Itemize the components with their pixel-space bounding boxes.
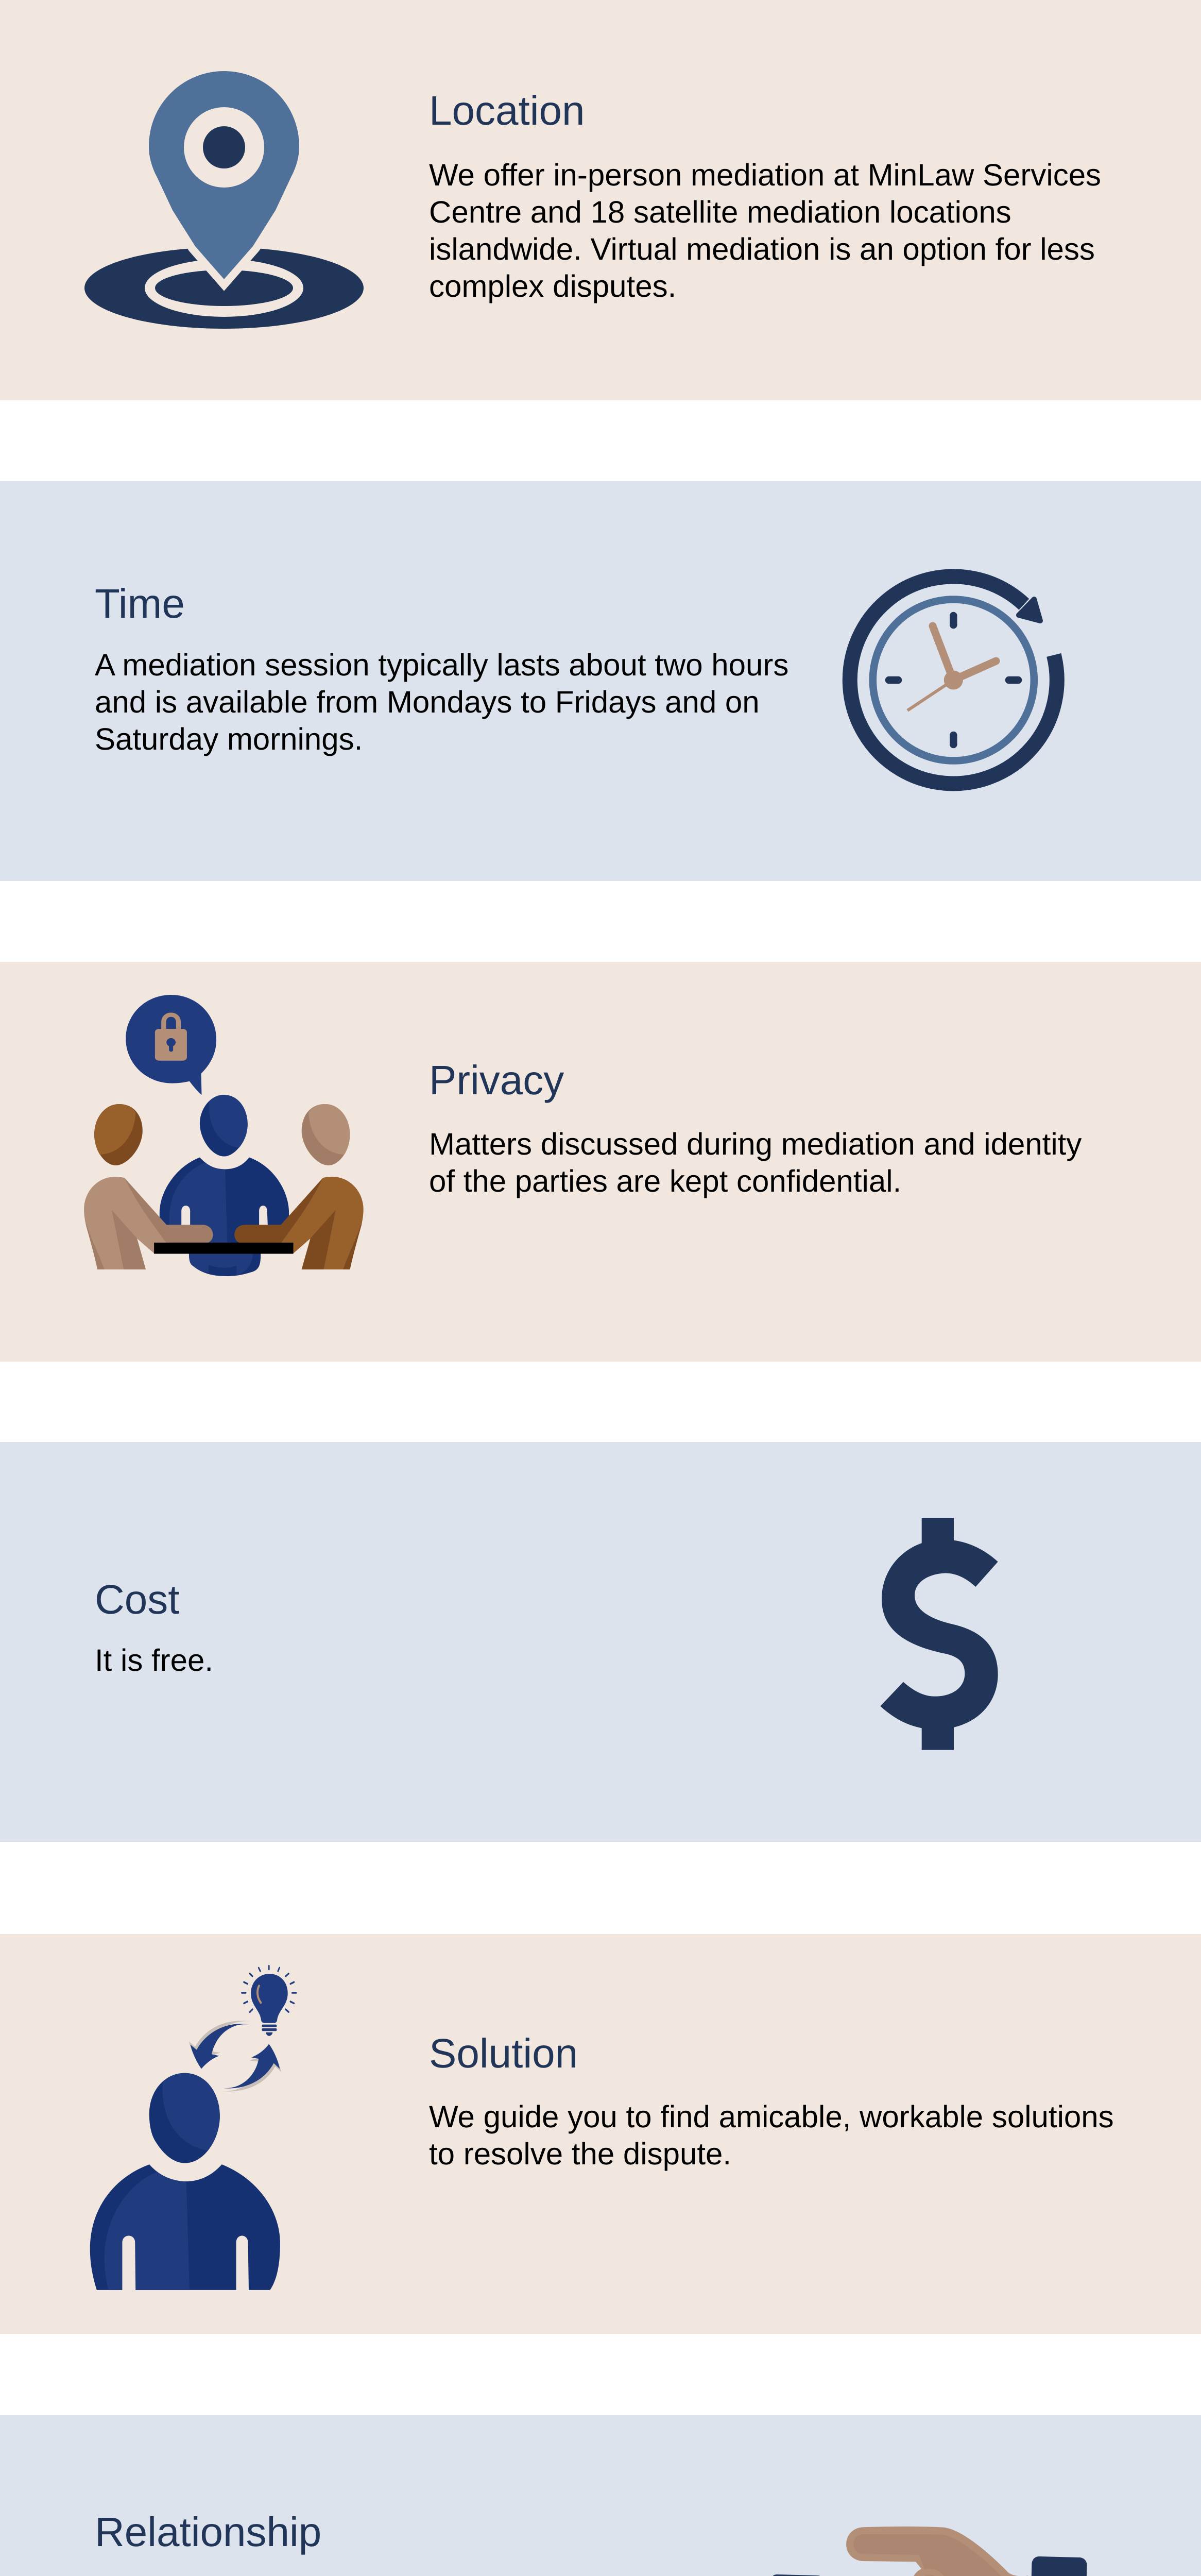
text: solution description: to resolve the dispute. <box>429 2137 731 2171</box>
heading: privacy: Privacy <box>429 1057 564 1103</box>
icon: two hands <box>767 2527 1087 2576</box>
heading: solution: Solution <box>429 2030 578 2076</box>
icon: light bulb <box>242 1966 296 2036</box>
heading: time: Time <box>95 581 185 626</box>
text: time description: Saturday mornings. <box>95 722 363 756</box>
panel: time <box>0 481 1201 881</box>
text: location description: We offer in-person mediation at MinLaw Services <box>429 158 1101 192</box>
icon: clock <box>850 577 1057 784</box>
panel: relationship <box>0 2415 1201 2576</box>
icon: dollar sign <box>880 1518 998 1750</box>
icon: three people at a table with a lock bubble <box>84 995 364 1276</box>
text: location description: Centre and 18 satellite mediation locations <box>429 195 1011 229</box>
heading: cost: Cost <box>95 1577 179 1622</box>
text: location description: islandwide. Virtual mediation is an option for less <box>429 232 1095 266</box>
panel: solution <box>0 1934 1201 2334</box>
text: cost description: It is free. <box>95 1643 213 1677</box>
text: time description: A mediation session typically lasts about two hours <box>95 648 788 682</box>
text: solution description: We guide you to find amicable, workable solutions <box>429 2099 1114 2134</box>
panel: location <box>0 0 1201 400</box>
icon: person with idea bulb <box>90 1966 296 2290</box>
panel: cost <box>0 1442 1201 1842</box>
icon: map pin <box>84 71 364 329</box>
arrows: cycle <box>189 2021 281 2092</box>
heading: relationship: Relationship <box>95 2509 321 2555</box>
heading: location: Location <box>429 88 585 133</box>
icon: padlock <box>155 1015 187 1061</box>
text: location description: complex disputes. <box>429 269 676 303</box>
text: time description: and is available from Mondays to Fridays and on <box>95 685 760 719</box>
text: privacy description: of the parties are kept confidential. <box>429 1164 901 1198</box>
text: privacy description: Matters discussed during mediation and identity <box>429 1127 1082 1161</box>
panel: privacy <box>0 962 1201 1362</box>
